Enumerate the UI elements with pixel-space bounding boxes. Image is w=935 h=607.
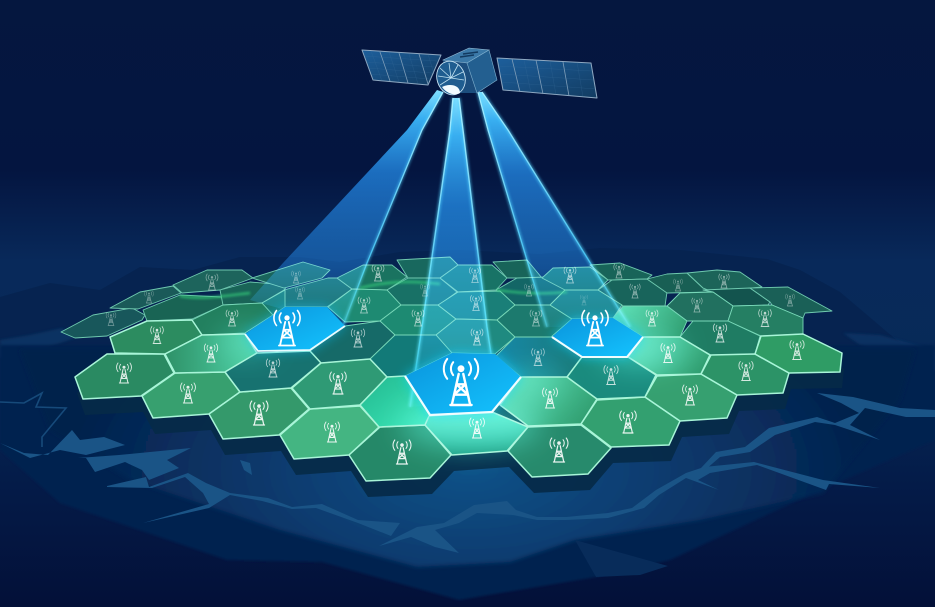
blue cell: right xyxy=(552,318,643,357)
highlighted blue cells xyxy=(245,307,643,415)
cell tower icons xyxy=(106,264,804,464)
front row cells xyxy=(75,320,842,481)
hexagonal cell grid xyxy=(61,257,842,481)
cell glow overlays xyxy=(217,328,682,449)
back row green streaks xyxy=(180,282,567,298)
beam: right xyxy=(478,92,630,327)
blue cell: left xyxy=(245,307,345,351)
beam: centre xyxy=(410,98,498,407)
terrain: rivers xyxy=(0,393,935,577)
arm connector xyxy=(488,64,493,80)
background: distant mountain horizon xyxy=(0,248,935,440)
terrain: dark base landmass xyxy=(0,345,935,600)
solar panel: left xyxy=(362,50,441,85)
satellite xyxy=(362,48,597,98)
beam: left xyxy=(250,90,443,326)
solar panel: right xyxy=(497,58,597,98)
signal beams from satellite xyxy=(250,90,630,407)
terrain: lit central landmass xyxy=(20,350,915,567)
blue cell: centre xyxy=(405,353,521,415)
satellite body xyxy=(443,48,497,93)
hex grid drop shadow xyxy=(77,336,844,497)
middle row cells xyxy=(192,289,803,377)
back row cells xyxy=(61,257,832,338)
dish antenna xyxy=(432,58,470,98)
